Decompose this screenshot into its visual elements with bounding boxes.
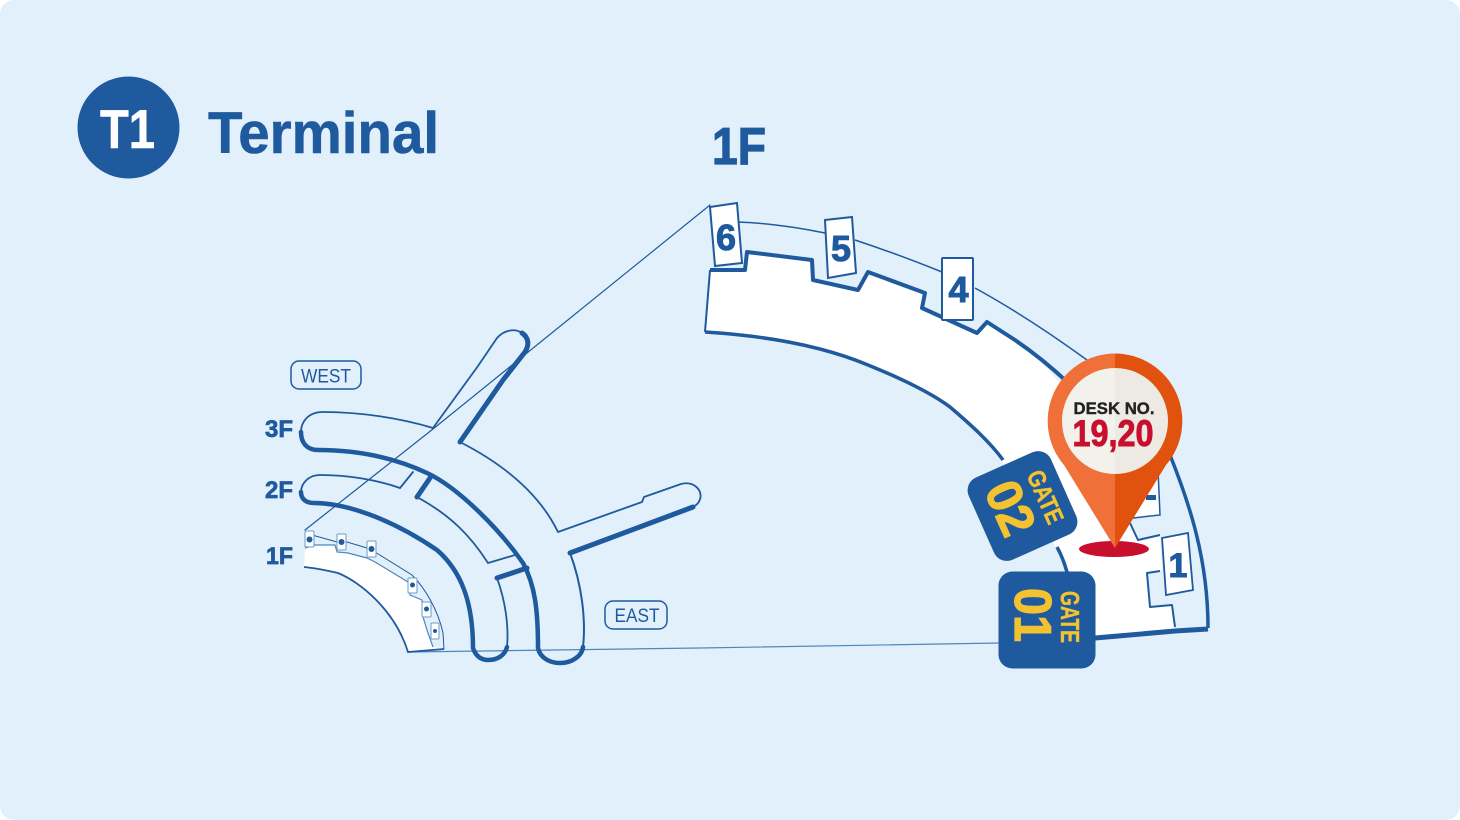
desk tab 1: 1 xyxy=(1169,547,1187,585)
desk number: 19,20 xyxy=(1072,413,1154,454)
heading: 1F: 1F xyxy=(712,118,766,176)
title: Terminal: Terminal xyxy=(208,101,439,166)
badge: GATE 02: 02 xyxy=(974,472,1047,544)
enlarged 1F floor plan xyxy=(705,203,1208,638)
header: T1 Terminal xyxy=(78,76,439,178)
terminal overview map xyxy=(301,205,1000,663)
label: 2F: 2F xyxy=(265,477,293,504)
desk label: DESK NO. xyxy=(1074,399,1154,418)
lower right wall xyxy=(1130,523,1175,627)
label: 1F floor: 1F xyxy=(266,543,293,570)
badge: GATE 02 xyxy=(963,447,1082,565)
badge: GATE 01: 01 xyxy=(1003,588,1061,642)
desk tab 5: 5 xyxy=(831,228,851,269)
label: WEST xyxy=(291,361,361,389)
label: WEST: WEST xyxy=(301,366,351,388)
badge: GATE 02: GATE xyxy=(1021,466,1069,528)
desk tab 4: 4 xyxy=(948,269,969,310)
outer thin curve xyxy=(737,222,1087,360)
icon: T1 badge: T1 xyxy=(100,98,155,160)
mini 1F floor plan xyxy=(304,531,444,652)
zoom guide lines xyxy=(305,205,1000,652)
desk tab 4 xyxy=(942,258,973,320)
thick inner wall xyxy=(710,252,1090,405)
3F floor outline xyxy=(301,330,701,663)
desk tab 6 xyxy=(710,203,742,266)
desk tab 5 xyxy=(825,217,856,278)
icon: location pin DESK NO. 19,20 xyxy=(1048,354,1182,557)
desk tab 1 xyxy=(1162,533,1193,595)
label: EAST: EAST xyxy=(614,606,660,627)
pin body xyxy=(1048,354,1115,548)
badge: GATE 01: GATE xyxy=(1055,591,1085,643)
badge: GATE 01 xyxy=(998,572,1096,668)
2F floor outline xyxy=(301,472,527,660)
desk tab 2 xyxy=(1133,470,1160,518)
pin shadow xyxy=(1079,541,1149,557)
label: EAST xyxy=(605,601,667,629)
label: 3F: 3F xyxy=(265,416,293,443)
inner bottom arc xyxy=(705,270,710,332)
outer right wall xyxy=(1170,455,1208,628)
white concourse area xyxy=(705,252,1175,638)
icon: T1 badge xyxy=(78,76,180,178)
desk tab 6: 6 xyxy=(716,217,736,258)
pin face xyxy=(1062,368,1115,474)
